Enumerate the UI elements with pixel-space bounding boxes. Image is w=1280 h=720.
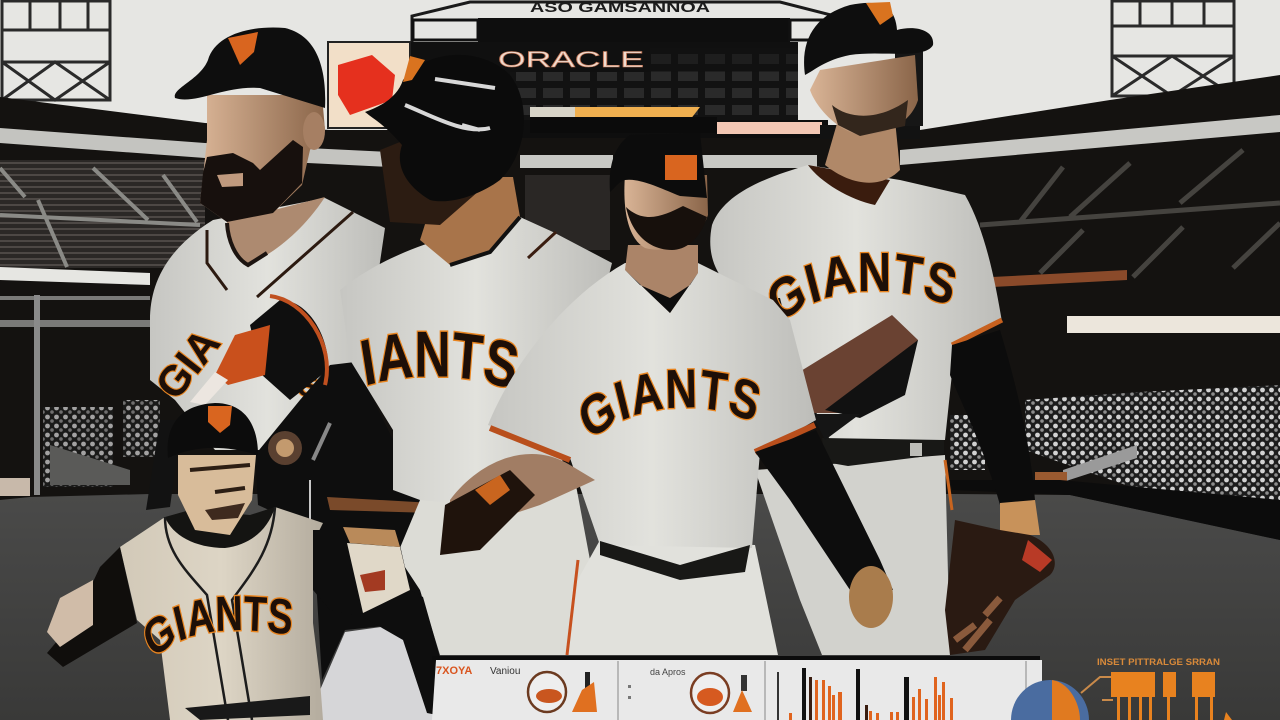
player 3: centre fielder [440,117,893,656]
background: sky [0,0,1280,135]
bar chart [777,668,953,720]
spool icon [1011,680,1089,720]
orange mini chart callout: INSET PITTRALGE SRRAN [1097,657,1220,667]
player 1: bearded pitcher: GIA [146,320,229,408]
panel backdrop glow [320,600,436,720]
dashboard card 2 [628,667,752,713]
scoreboard [328,0,923,139]
dashboard card 1: 7XOYA [436,665,472,677]
dashboard card 1 [436,665,597,712]
batting gear and equipment [146,362,440,680]
player 5: small front player [47,403,440,720]
player 2: batter with helmet [190,56,612,655]
orange mini chart callout [1081,657,1232,720]
dashboard card 1: Vaniou [490,666,520,677]
player 1: bearded pitcher [146,27,385,450]
player 1: bearded pitcher: S [298,370,318,403]
player 2: batter with helmet: IANTS [360,330,518,388]
outfield wall [950,480,1280,540]
player 4: right outfielder [710,2,1055,655]
light tower left [2,1,110,100]
field [0,494,1280,720]
player 4: right outfielder: GIANTS [768,252,956,318]
dashboard panel [432,658,1042,720]
player 3: centre fielder: GIANTS [580,368,760,435]
stadium stands [0,75,1280,510]
player 5: small front player: GIANTS [144,594,293,654]
light tower right [1112,1,1234,96]
scoreboard: ORACLE [498,47,644,72]
dashboard card 2: da Apros [650,667,686,677]
